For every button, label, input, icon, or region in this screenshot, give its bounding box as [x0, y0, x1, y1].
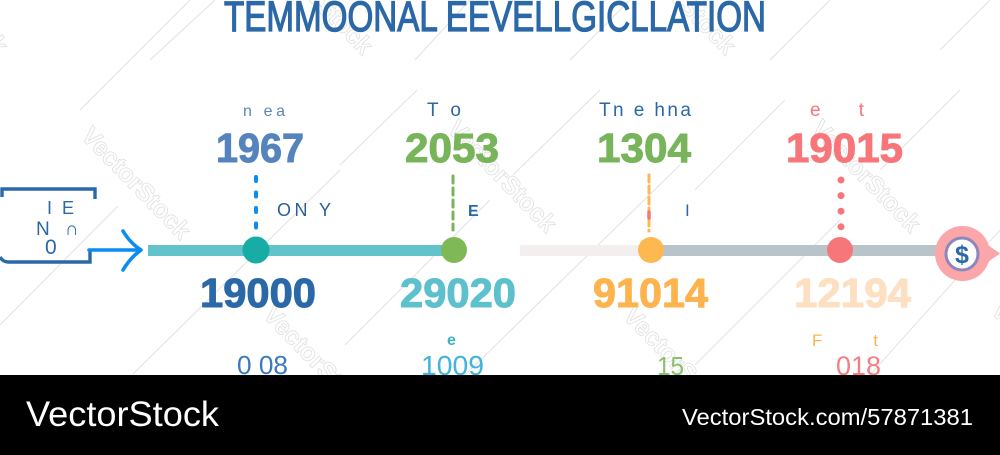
bottom number: 91014 — [593, 270, 708, 316]
milestone 3 — [593, 100, 708, 381]
marker — [827, 237, 853, 263]
intro box text: 0 — [45, 236, 57, 259]
watermark text: VectorStock — [806, 115, 926, 238]
label: n ea — [243, 103, 285, 120]
milestone 4 — [786, 100, 911, 381]
bottom number: 29020 — [400, 270, 516, 316]
label: e t — [810, 100, 865, 121]
watermark text: VectorStock — [76, 122, 196, 245]
small label: F t — [812, 331, 878, 350]
marker — [638, 237, 664, 263]
bottom small number: 1009 — [421, 350, 484, 381]
intro box text: E — [62, 198, 74, 218]
note: E — [468, 203, 479, 220]
intro box text: N — [36, 219, 50, 240]
top number: 2053 — [405, 125, 499, 171]
bottom number: 12194 — [794, 270, 911, 316]
label: T o — [427, 100, 461, 121]
bottom small number: 15 — [657, 351, 684, 381]
intro box text: ∩ — [65, 219, 79, 240]
milestone 2 — [400, 100, 516, 381]
panel: intro box with arrow — [0, 189, 141, 270]
arrow — [89, 231, 141, 270]
connector — [648, 175, 650, 231]
bottom number: 19000 — [200, 270, 316, 316]
bottom small number: 018 — [836, 351, 881, 381]
milestone 1 — [200, 103, 331, 380]
watermark text: VectorStock — [442, 115, 562, 238]
bottom small number: 0 08 — [237, 350, 288, 380]
watermark text: VectorStock — [258, 301, 378, 424]
intro box outline — [0, 189, 95, 262]
top number: 1967 — [216, 125, 304, 171]
footer url: VectorStock.com/57871381 — [682, 404, 973, 430]
icon: end badge with dollar sign — [935, 226, 1000, 281]
intro box text — [36, 198, 79, 259]
connector — [838, 180, 844, 228]
marker — [242, 236, 270, 264]
connector — [254, 177, 258, 231]
small label: e — [447, 332, 456, 349]
footer bar — [0, 375, 1000, 455]
note: ON Y — [277, 200, 331, 220]
watermark text: VectorStock — [618, 302, 738, 425]
label: Tn e hna — [599, 100, 691, 121]
intro box text: I — [47, 198, 52, 218]
connector accent — [647, 212, 651, 218]
timeline bar — [148, 245, 940, 256]
connector — [452, 176, 454, 230]
note: I — [685, 201, 690, 220]
icon: end badge with dollar sign: $ — [955, 241, 969, 269]
top number: 1304 — [597, 125, 691, 171]
footer logo: VectorStock — [26, 395, 220, 434]
top number: 19015 — [786, 125, 903, 171]
marker — [441, 237, 467, 263]
